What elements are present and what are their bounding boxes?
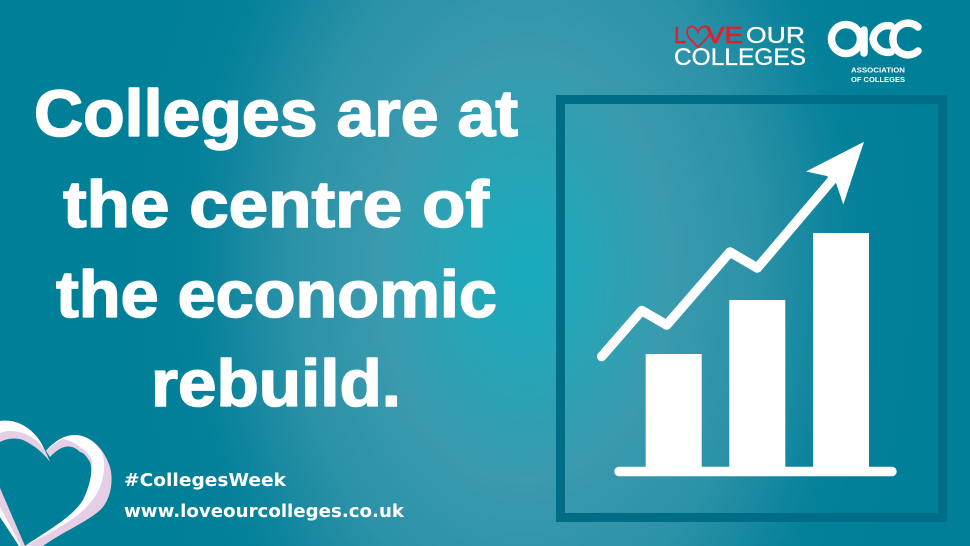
icon: logo heart [687, 26, 710, 47]
bar chart [614, 233, 897, 476]
logo caption: ASSOCIATION [851, 68, 905, 74]
right lobe white [25, 435, 104, 546]
title: Colleges are at [34, 76, 518, 150]
icon: heart outline [0, 421, 112, 546]
title: the economic [56, 257, 497, 331]
hashtag and website [124, 470, 405, 522]
panel frame [560, 100, 942, 518]
logo caption: OF COLLEGES [851, 77, 905, 84]
logo: Association of Colleges [832, 23, 918, 84]
left lobe white [0, 421, 44, 449]
title: rebuild. [151, 346, 401, 420]
left lobe pink [0, 421, 50, 462]
logo mark: aoc [832, 23, 918, 55]
hashtag and website: www.loveourcolleges.co.uk [124, 501, 405, 522]
logo: Love Our Colleges [674, 22, 806, 71]
arrow: upward trend [602, 142, 864, 356]
panel: rising bar chart [560, 100, 942, 518]
title: the centre of [63, 167, 490, 241]
bottom-left stroke pink [0, 488, 25, 546]
right lobe pink [25, 435, 112, 546]
title [34, 76, 518, 420]
hashtag and website: #CollegesWeek [124, 470, 287, 491]
logo: Love Our Colleges: OUR [746, 22, 805, 48]
bottom-left stroke white [0, 507, 21, 546]
logo: Love Our Colleges: COLLEGES [674, 44, 806, 71]
logo: Love Our Colleges: L [674, 22, 686, 48]
logo caption [851, 68, 905, 84]
logo: Love Our Colleges: VE [706, 22, 743, 48]
